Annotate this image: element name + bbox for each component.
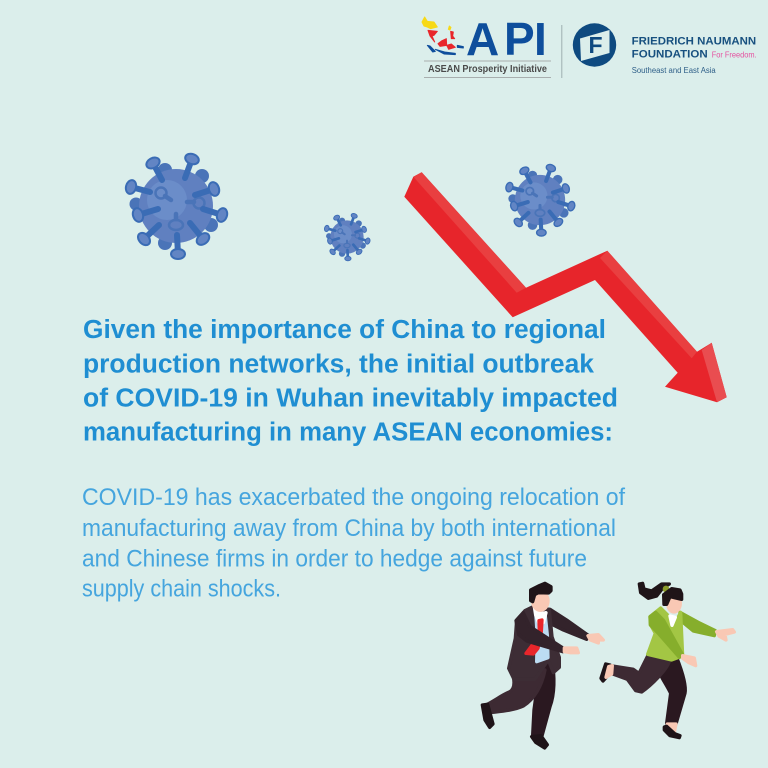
foundation region: Southeast and East Asia (632, 66, 716, 75)
logo: Friedrich Naumann Foundation (573, 23, 757, 75)
illustration: running woman (601, 583, 734, 738)
icon: foundation emblem: F (588, 32, 603, 58)
API tagline: ASEAN Prosperity Initiative (428, 64, 547, 75)
icon: foundation emblem (573, 23, 616, 67)
heading (83, 316, 618, 447)
rule below tagline (424, 77, 551, 78)
icon: large virus (124, 152, 229, 259)
logo: ASEAN Prosperity Initiative (422, 13, 551, 78)
icon: ASEAN map (422, 17, 463, 55)
heading: of COVID-19 in Wuhan inevitably impacted (83, 385, 618, 413)
foundation name line 1: FRIEDRICH NAUMANN (632, 35, 756, 47)
heading: manufacturing in many ASEAN economies: (83, 419, 613, 447)
foundation slogan: For Freedom. (712, 51, 757, 60)
body text: and Chinese firms in order to hedge against future (82, 546, 587, 573)
icon: small virus (324, 213, 371, 261)
body text (82, 484, 625, 603)
body text: supply chain shocks. (82, 576, 281, 603)
body text: manufacturing away from China by both international (82, 515, 616, 542)
icon: medium virus (505, 163, 576, 236)
heading: Given the importance of China to regional (83, 316, 606, 344)
rule above tagline (424, 60, 551, 62)
arrow: falling red trend (404, 172, 727, 402)
body text: COVID-19 has exacerbated the ongoing relocation of (82, 484, 625, 511)
illustration: running man (482, 583, 603, 748)
API wordmark: API (466, 13, 547, 65)
foundation name line 2: FOUNDATION (632, 49, 708, 61)
heading: production networks, the initial outbreak (83, 351, 595, 379)
